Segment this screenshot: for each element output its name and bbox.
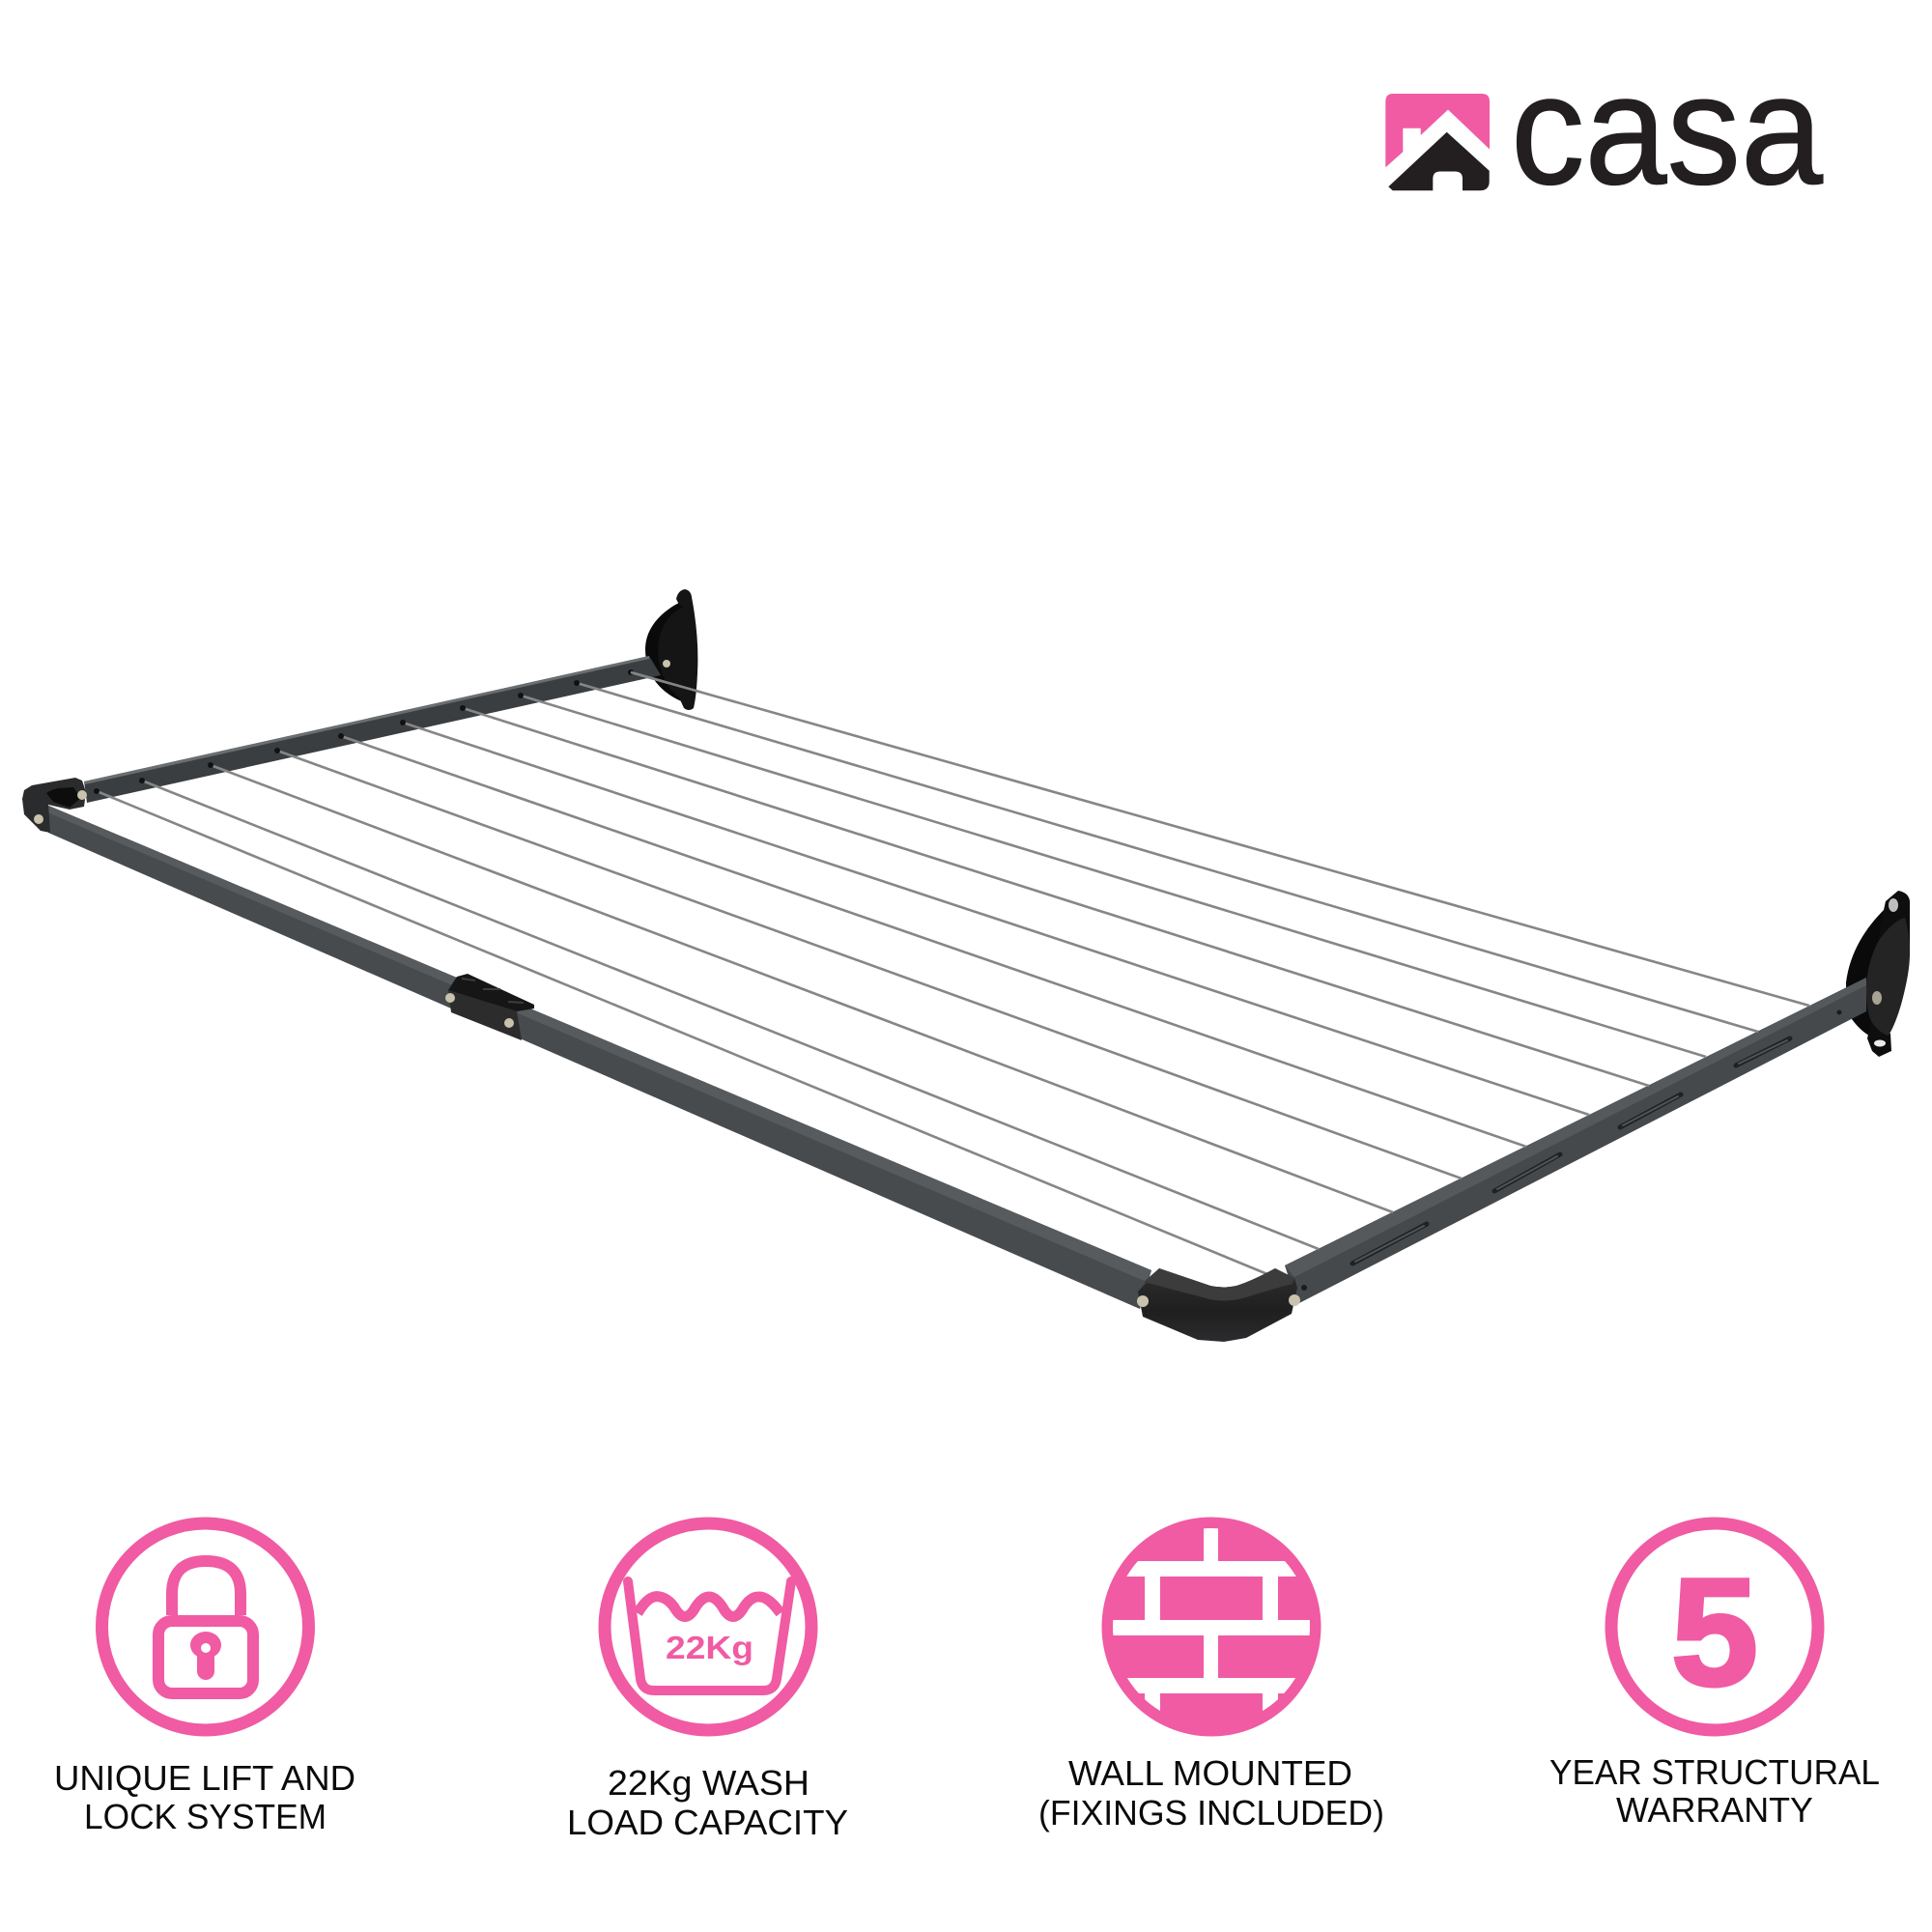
wires [97,672,1809,1274]
feature: warranty [1549,1523,1880,1830]
icon: number 5: 5 [1671,1548,1758,1718]
lift and lock clip [445,974,534,1040]
icon: number 5 [1611,1523,1818,1730]
left corner bracket [22,778,87,833]
label: wall mounted fixings included: WALL MOUNTED [1068,1753,1352,1793]
label: unique lift and lock system: LOCK SYSTEM [84,1797,327,1836]
front bar [46,805,1151,1309]
label: wall mounted fixings included [1038,1753,1384,1833]
feature: wall mounted [1038,1517,1384,1833]
icon: brick wall [1101,1517,1321,1737]
wire holes [94,669,634,794]
right wall bracket [1866,891,1910,1057]
label: year structural warranty: YEAR STRUCTURAL [1549,1752,1880,1792]
label: 22Kg wash load capacity: 22Kg WASH [608,1763,810,1803]
label: 22Kg wash load capacity [567,1763,848,1842]
near corner bracket [1137,1268,1300,1342]
icon text: 22Kg: 22Kg [666,1630,753,1665]
product: wall mounted clothes line rack [22,589,1910,1342]
logo icon: pink roof square [1385,94,1490,167]
back bar [84,656,661,803]
feature: wash load capacity [567,1523,848,1842]
label: year structural warranty [1549,1752,1880,1830]
side bar with slots [1285,978,1866,1304]
feature: lift and lock [54,1523,355,1836]
label: unique lift and lock system: UNIQUE LIFT AND [54,1758,355,1798]
label: 22Kg wash load capacity: LOAD CAPACITY [567,1803,848,1842]
back bracket rear plate [645,601,684,702]
label: wall mounted fixings included: (FIXINGS INCLUDED) [1038,1793,1384,1833]
label: year structural warranty: WARRANTY [1616,1790,1813,1830]
label: unique lift and lock system [54,1758,355,1836]
back bracket front plate [631,589,699,710]
logo wordmark: casa [1511,43,1824,217]
logo: casa [1385,43,1824,217]
icon: padlock [102,1523,309,1730]
icon: wash tub [605,1523,811,1730]
logo icon: black house [1388,132,1490,190]
right bracket rear plate [1846,910,1893,1037]
